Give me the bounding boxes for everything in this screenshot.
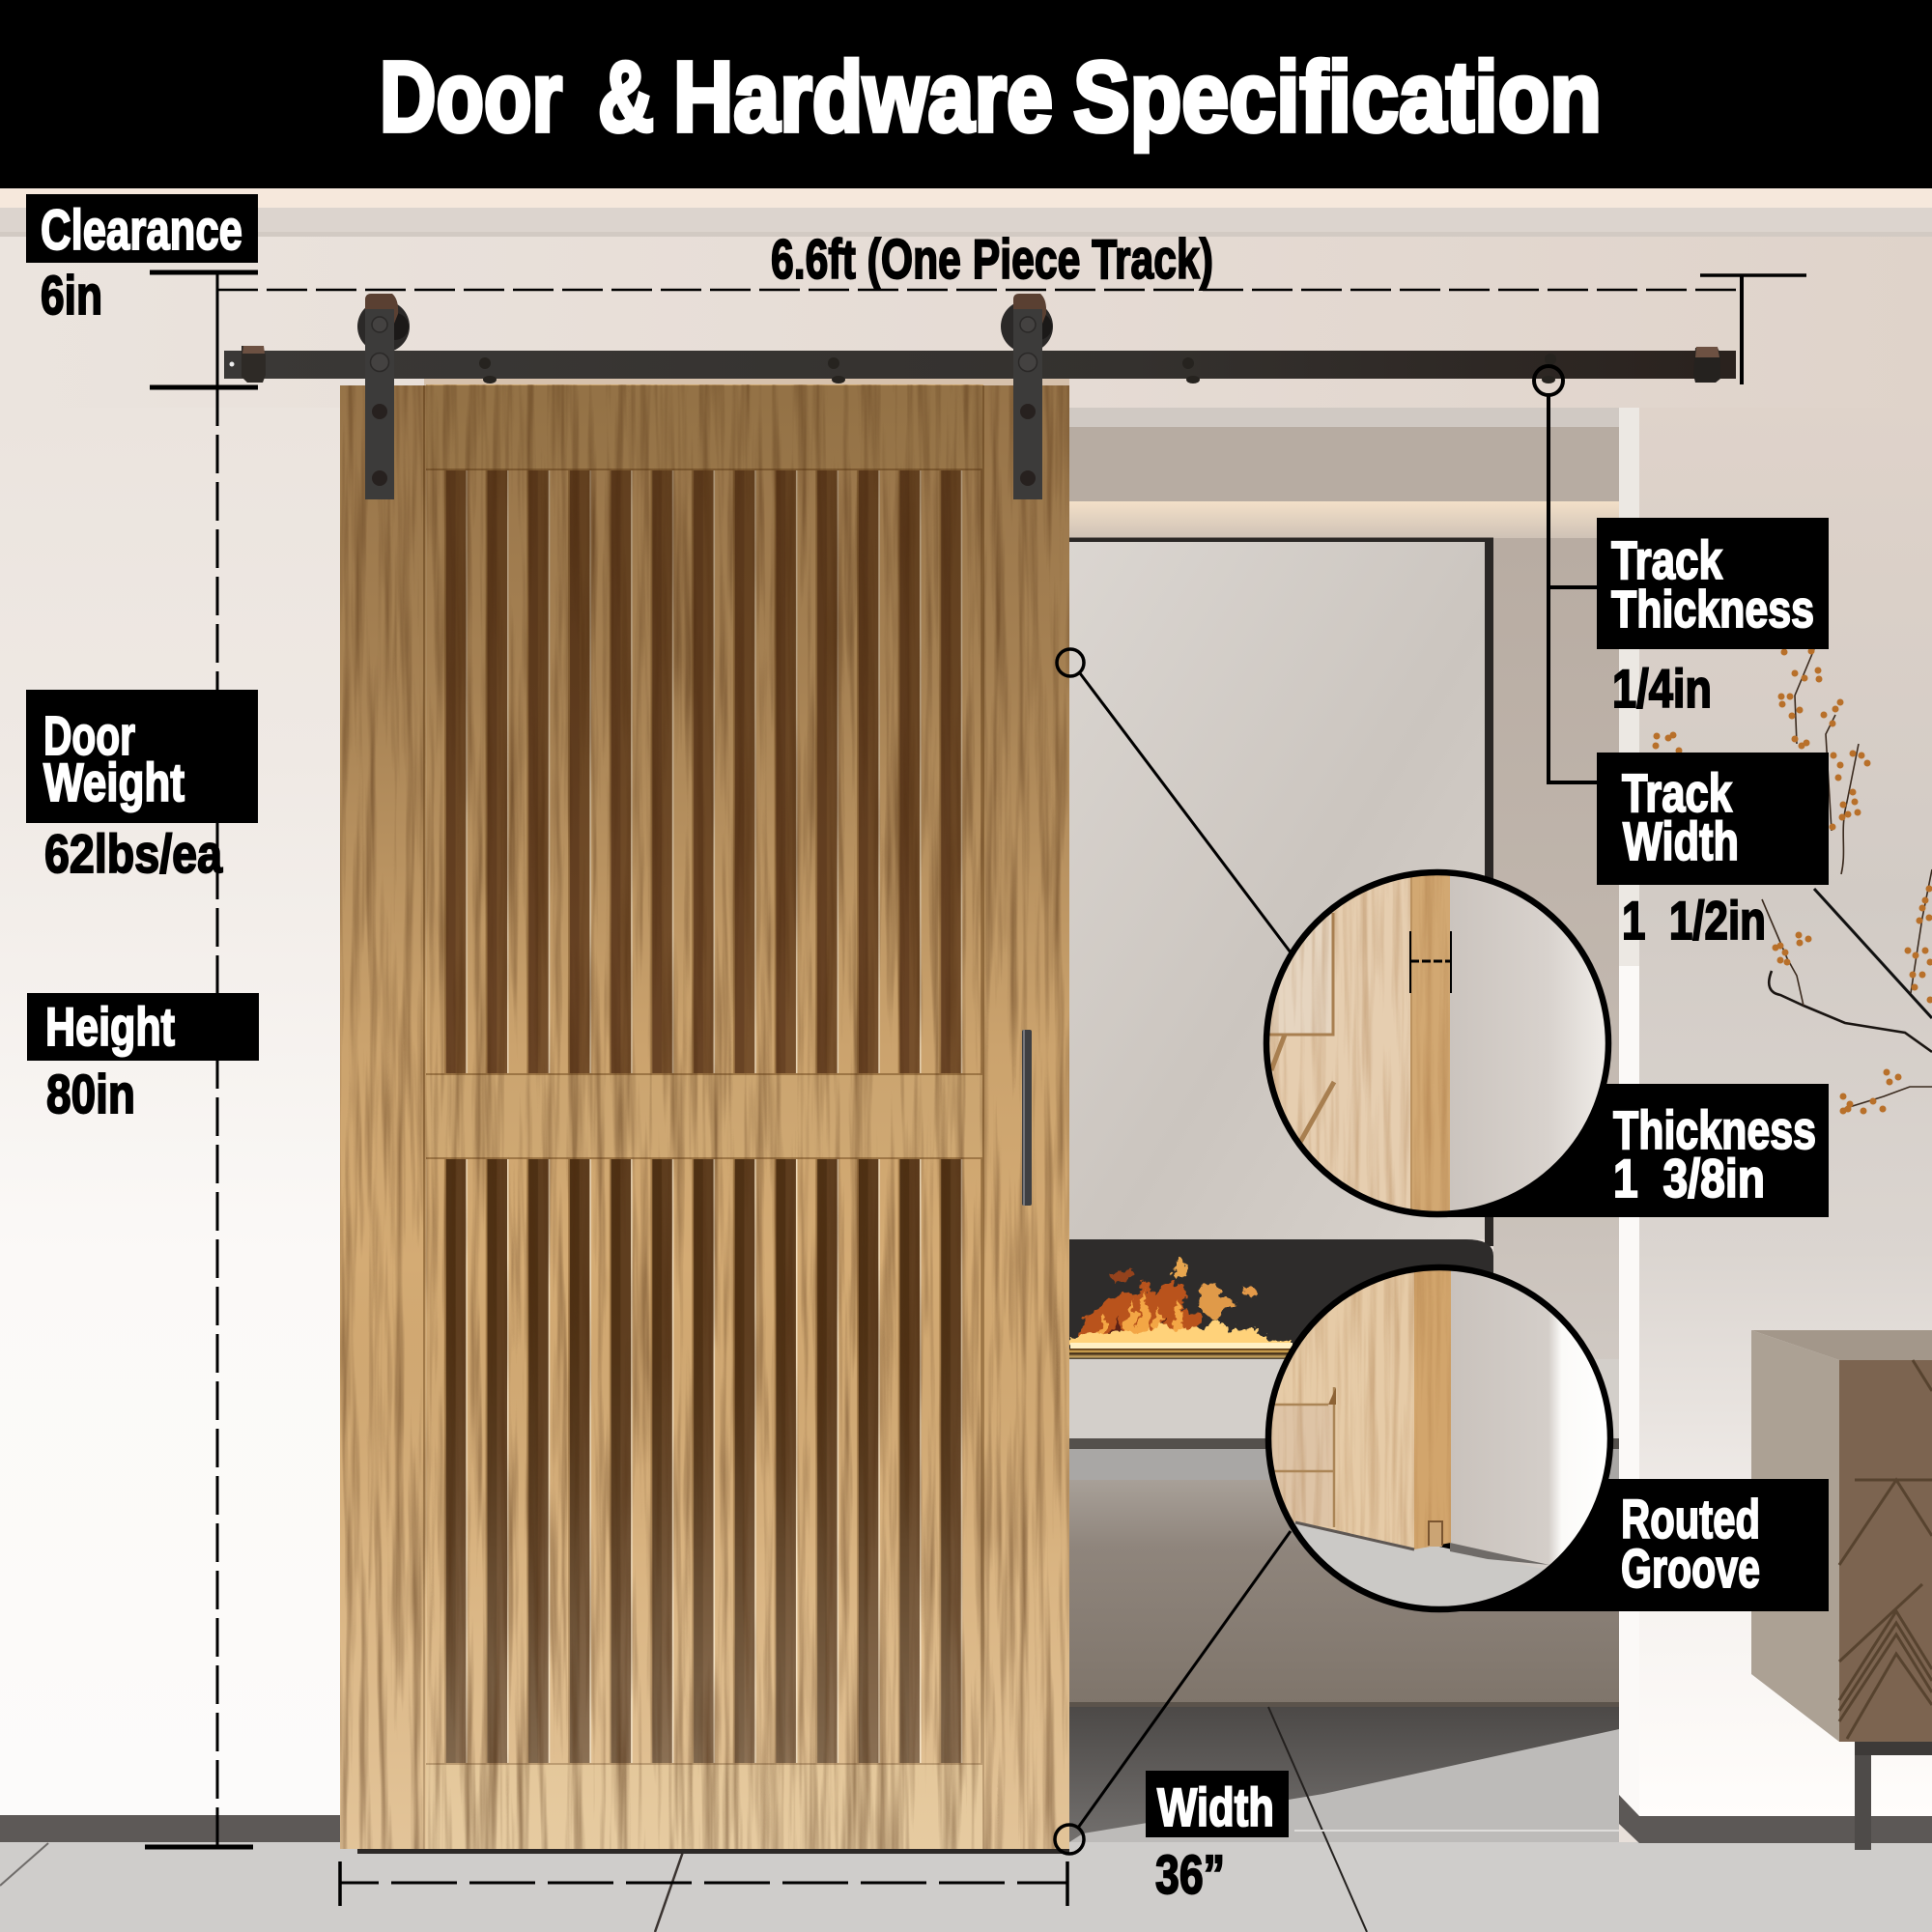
- top rail: [426, 384, 983, 469]
- thickness dimension marks: [1410, 931, 1451, 993]
- label box: thickness: [1439, 1084, 1829, 1217]
- title: &: [598, 41, 654, 152]
- clearance dimension: [150, 272, 258, 387]
- door handle: [1022, 1030, 1032, 1206]
- label box: routed groove: [1439, 1479, 1829, 1611]
- label: door weight: Door: [43, 704, 135, 766]
- magnifier: door thickness detail: [1256, 869, 1614, 1217]
- sliding track: [224, 346, 1736, 384]
- text: 36”: [1155, 1843, 1225, 1905]
- flame body: [1070, 1259, 1294, 1348]
- middle rail: [426, 1074, 983, 1158]
- right hanger: [1001, 294, 1053, 499]
- right end bracket: [1693, 348, 1720, 383]
- left end bracket: [242, 346, 266, 383]
- text: Weight: [43, 753, 185, 812]
- text: 80in: [46, 1063, 135, 1124]
- barn door: [340, 384, 1069, 1849]
- baseboards: [0, 1795, 1932, 1843]
- decorative berry branches: [1652, 647, 1932, 1115]
- magnifier: routed groove detail: [1256, 1265, 1614, 1613]
- label: track thickness: [1597, 518, 1829, 649]
- routed groove leader: [1055, 1531, 1291, 1854]
- text: Clearance: [41, 198, 242, 262]
- fireplace with flames: [1069, 1239, 1493, 1359]
- upper slat panel: [426, 469, 983, 1074]
- text: 62lbs/ea: [44, 824, 222, 884]
- lower slat panel: [426, 1158, 983, 1764]
- label: height: [27, 993, 259, 1061]
- thickness callout leader: [1057, 649, 1291, 952]
- text: 6in: [41, 264, 102, 326]
- door width dimension: [340, 1861, 1067, 1906]
- title: [380, 41, 1602, 152]
- concrete wall and floor behind opening: [1069, 1359, 1619, 1707]
- text: Height: [45, 997, 175, 1057]
- door height dimension line: [145, 387, 253, 1847]
- track callout leader: [1534, 366, 1597, 782]
- track length dimension line: [217, 275, 1806, 384]
- title: Door: [380, 41, 562, 152]
- track stops: [479, 354, 1556, 384]
- left hanger: [357, 294, 410, 499]
- label: width: [1146, 1771, 1289, 1837]
- label: door weight: [26, 690, 258, 823]
- cabinet: [1751, 1330, 1932, 1850]
- floor: [0, 1707, 1932, 1932]
- text: Width: [1157, 1777, 1274, 1837]
- label: clearance: [26, 194, 258, 263]
- bottom rail: [426, 1764, 983, 1849]
- door top edge below track: [424, 379, 1069, 385]
- title banner: [0, 0, 1932, 188]
- label: track width: [1597, 753, 1829, 885]
